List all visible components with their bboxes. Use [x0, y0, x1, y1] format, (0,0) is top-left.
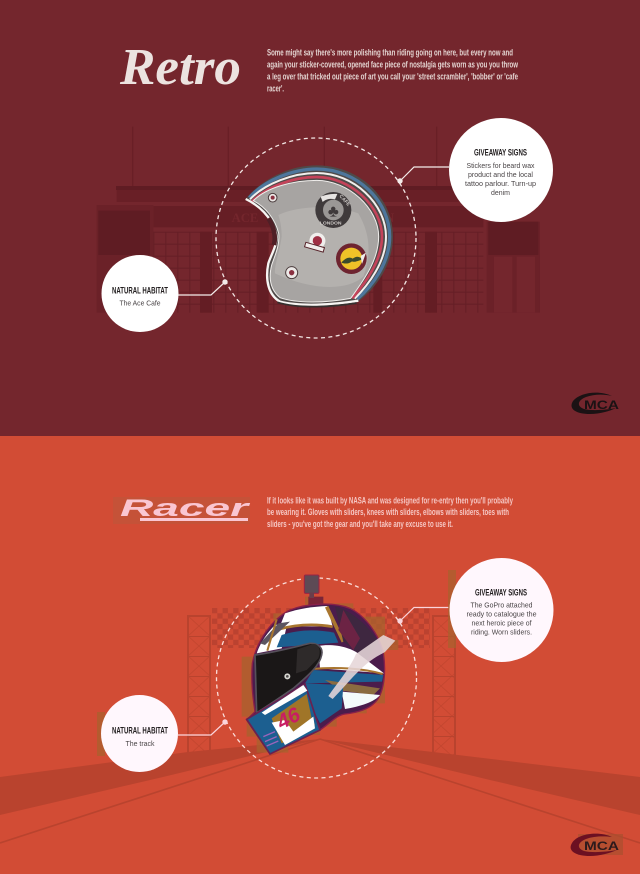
intro text: retro	[267, 46, 518, 94]
intro text: racer: If it looks like it was built by NASA and was designed for re-entry then you'll probably	[267, 494, 514, 506]
logo: retro: Retro	[119, 39, 241, 96]
sticker: cafe london: ♣	[328, 201, 339, 220]
callout: giveaway signs: Stickers for beard wax	[466, 161, 535, 170]
intro text: retro: Some might say there's more polishing than riding going on here, but every now and	[267, 46, 513, 58]
connector: giveaway signs	[397, 608, 449, 624]
sticker: cafe london: CAFE	[338, 194, 352, 208]
dashed circle: racer	[216, 578, 416, 778]
gopro camera	[304, 575, 323, 605]
callout: giveaway signs: GIVEAWAY SIGNS	[475, 588, 527, 598]
logo: racer: Racer	[120, 495, 251, 522]
callout: natural habitat	[97, 695, 178, 772]
intro text: racer: be wearing it. Gloves with sliders, knees with sliders, elbows with sliders, toes with	[267, 506, 509, 517]
panel: racer	[0, 436, 640, 874]
connector: natural habitat	[178, 719, 228, 735]
connector: giveaway signs	[397, 167, 449, 184]
callout: giveaway signs: ready to catalogue the	[466, 610, 536, 618]
connector: natural habitat	[178, 279, 228, 295]
callout: giveaway signs: denim	[491, 188, 510, 197]
illustration: checkered banner	[212, 608, 430, 648]
illustration: racer helmet	[242, 575, 398, 754]
callout: giveaway signs: next heroic piece of	[472, 618, 532, 628]
illustration: ace cafe building: ACE	[232, 211, 258, 225]
intro text: retro: a leg over that tricked out piece of art you call your 'street scrambler', 'bobber' or 'cafe	[267, 70, 518, 82]
callout: giveaway signs	[448, 558, 554, 662]
logo: mca bottom: MCA	[584, 839, 619, 853]
illustration: track shadows	[0, 739, 640, 843]
logo: racer	[113, 495, 251, 524]
callout: natural habitat: NATURAL HABITAT	[112, 286, 168, 296]
racer background	[0, 436, 640, 874]
retro background	[0, 0, 640, 436]
intro text: retro: racer'.	[267, 82, 284, 94]
callout: giveaway signs	[449, 118, 553, 222]
intro text: racer: sliders - you've got the gear and you'll take any excuse to use it.	[267, 518, 453, 529]
sticker: cafe london: LONDON	[320, 221, 342, 227]
callout: natural habitat	[102, 255, 178, 332]
logo: mca bottom	[571, 834, 623, 856]
illustration: retro helmet	[246, 165, 393, 307]
illustration: right tower	[433, 616, 455, 756]
callout: giveaway signs: product and the local	[468, 170, 533, 179]
chin with number 46	[247, 684, 320, 754]
visor	[255, 643, 322, 713]
dashed circle: retro	[216, 138, 416, 338]
sticker: moustache	[336, 243, 367, 274]
panel: retro	[0, 0, 640, 436]
illustration: ace cafe building	[97, 127, 540, 313]
logo: mca top: MCA	[584, 398, 619, 412]
callout: natural habitat: The track	[126, 739, 155, 748]
slider fin	[328, 635, 395, 699]
callout: giveaway signs: GIVEAWAY SIGNS	[474, 148, 527, 158]
callout: giveaway signs: tattoo parlour. Turn-up	[465, 179, 536, 188]
sticker: cafe london	[315, 192, 352, 228]
callout: natural habitat: NATURAL HABITAT	[112, 726, 168, 736]
callout: natural habitat: The Ace Cafe	[120, 298, 160, 308]
chin with number 46: 46	[272, 703, 305, 735]
snap: bottom	[286, 267, 298, 279]
illustration: left tower	[188, 616, 210, 756]
callout: giveaway signs: The GoPro attached	[470, 600, 532, 610]
logo: mca top	[572, 393, 619, 414]
intro text: racer	[267, 494, 514, 529]
callout: giveaway signs: riding. Worn sliders.	[471, 628, 532, 636]
illustration: ace cafe building: N	[385, 211, 394, 225]
sticker: target badge	[305, 230, 328, 252]
snap: top	[268, 193, 277, 202]
